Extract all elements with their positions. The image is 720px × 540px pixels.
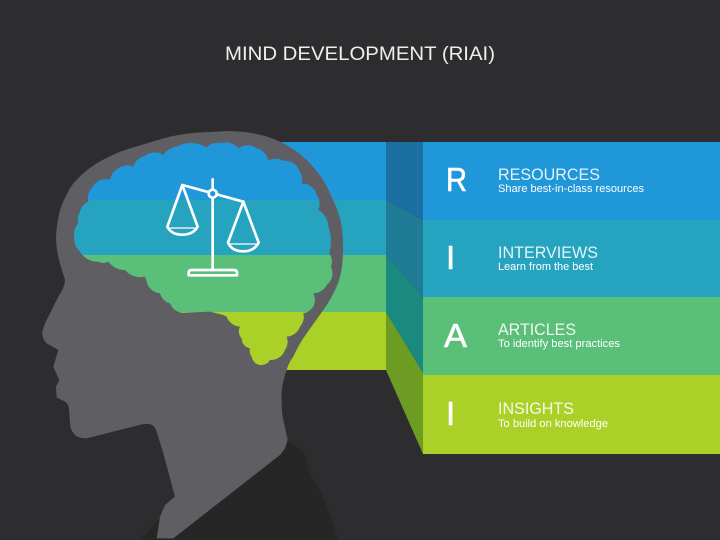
title: MIND DEVELOPMENT (RIAI) <box>225 44 495 65</box>
row: resources: RESOURCES <box>498 166 600 184</box>
row: interviews: INTERVIEWS <box>498 244 598 262</box>
row: resources: R <box>446 161 467 198</box>
row: insights: To build on knowledge <box>498 418 608 430</box>
folded colour panels <box>386 142 423 454</box>
row: articles <box>444 317 620 354</box>
row: insights: INSIGHTS <box>498 400 574 418</box>
brain with coloured bands <box>74 142 332 366</box>
row: articles: A <box>444 317 467 354</box>
row: articles: ARTICLES <box>498 321 576 339</box>
jacket silhouette <box>140 440 338 540</box>
row: articles: To identify best practices <box>498 338 620 350</box>
row: resources: Share best-in-class resources <box>498 183 644 195</box>
row: interviews: I <box>446 239 455 276</box>
row: interviews: Learn from the best <box>498 261 593 273</box>
row: resources <box>446 161 644 198</box>
row: interviews <box>446 239 598 276</box>
icon: balance scale <box>167 179 259 275</box>
right colour bands <box>423 142 720 454</box>
row: insights <box>446 395 608 432</box>
left colour strips behind head <box>270 142 386 370</box>
row: insights: I <box>446 395 455 432</box>
head silhouette <box>42 131 343 538</box>
